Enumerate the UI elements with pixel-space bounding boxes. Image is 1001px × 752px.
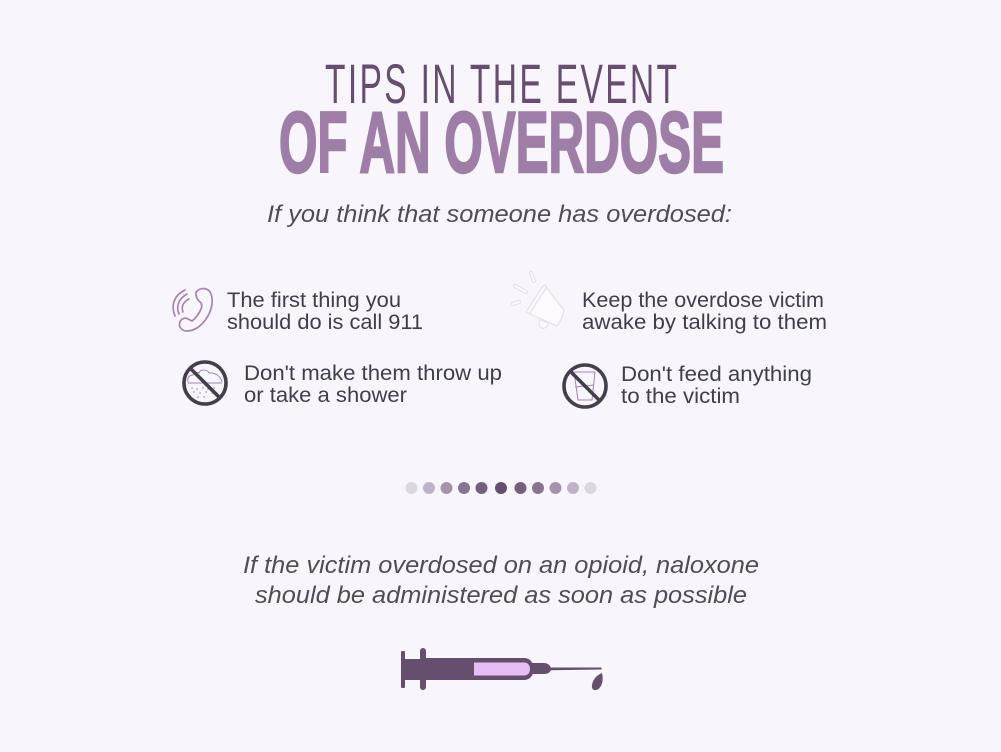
tip: no vomiting or shower: or take a shower <box>244 384 407 407</box>
tip: call 911: The first thing you <box>227 289 401 312</box>
tip: no vomiting or shower: Don't make them throw up <box>244 362 502 385</box>
tip: keep awake: awake by talking to them <box>582 311 827 334</box>
tip: keep awake <box>582 289 827 334</box>
naloxone statement: should be administered as soon as possible <box>255 582 747 609</box>
dotted divider <box>406 482 596 494</box>
icon: syringe <box>401 648 603 690</box>
icon: no drink <box>564 365 606 407</box>
icon: megaphone <box>513 273 564 328</box>
icon: telephone <box>173 289 212 331</box>
naloxone statement <box>243 552 759 609</box>
tip: keep awake: Keep the overdose victim <box>582 289 824 312</box>
tip: do not feed: Don't feed anything <box>621 363 812 386</box>
title line 1: TIPS IN THE EVENT <box>325 52 677 115</box>
icon: no shower <box>184 362 226 404</box>
syringe fluid <box>474 662 530 676</box>
subtitle: If you think that someone has overdosed: <box>267 201 732 228</box>
tip: call 911 <box>227 289 423 334</box>
tip: call 911: should do is call 911 <box>227 311 423 334</box>
naloxone statement: If the victim overdosed on an opioid, naloxone <box>243 552 759 579</box>
tip: do not feed: to the victim <box>621 385 740 408</box>
tip: no vomiting or shower <box>244 362 502 407</box>
tip: do not feed <box>621 363 812 408</box>
